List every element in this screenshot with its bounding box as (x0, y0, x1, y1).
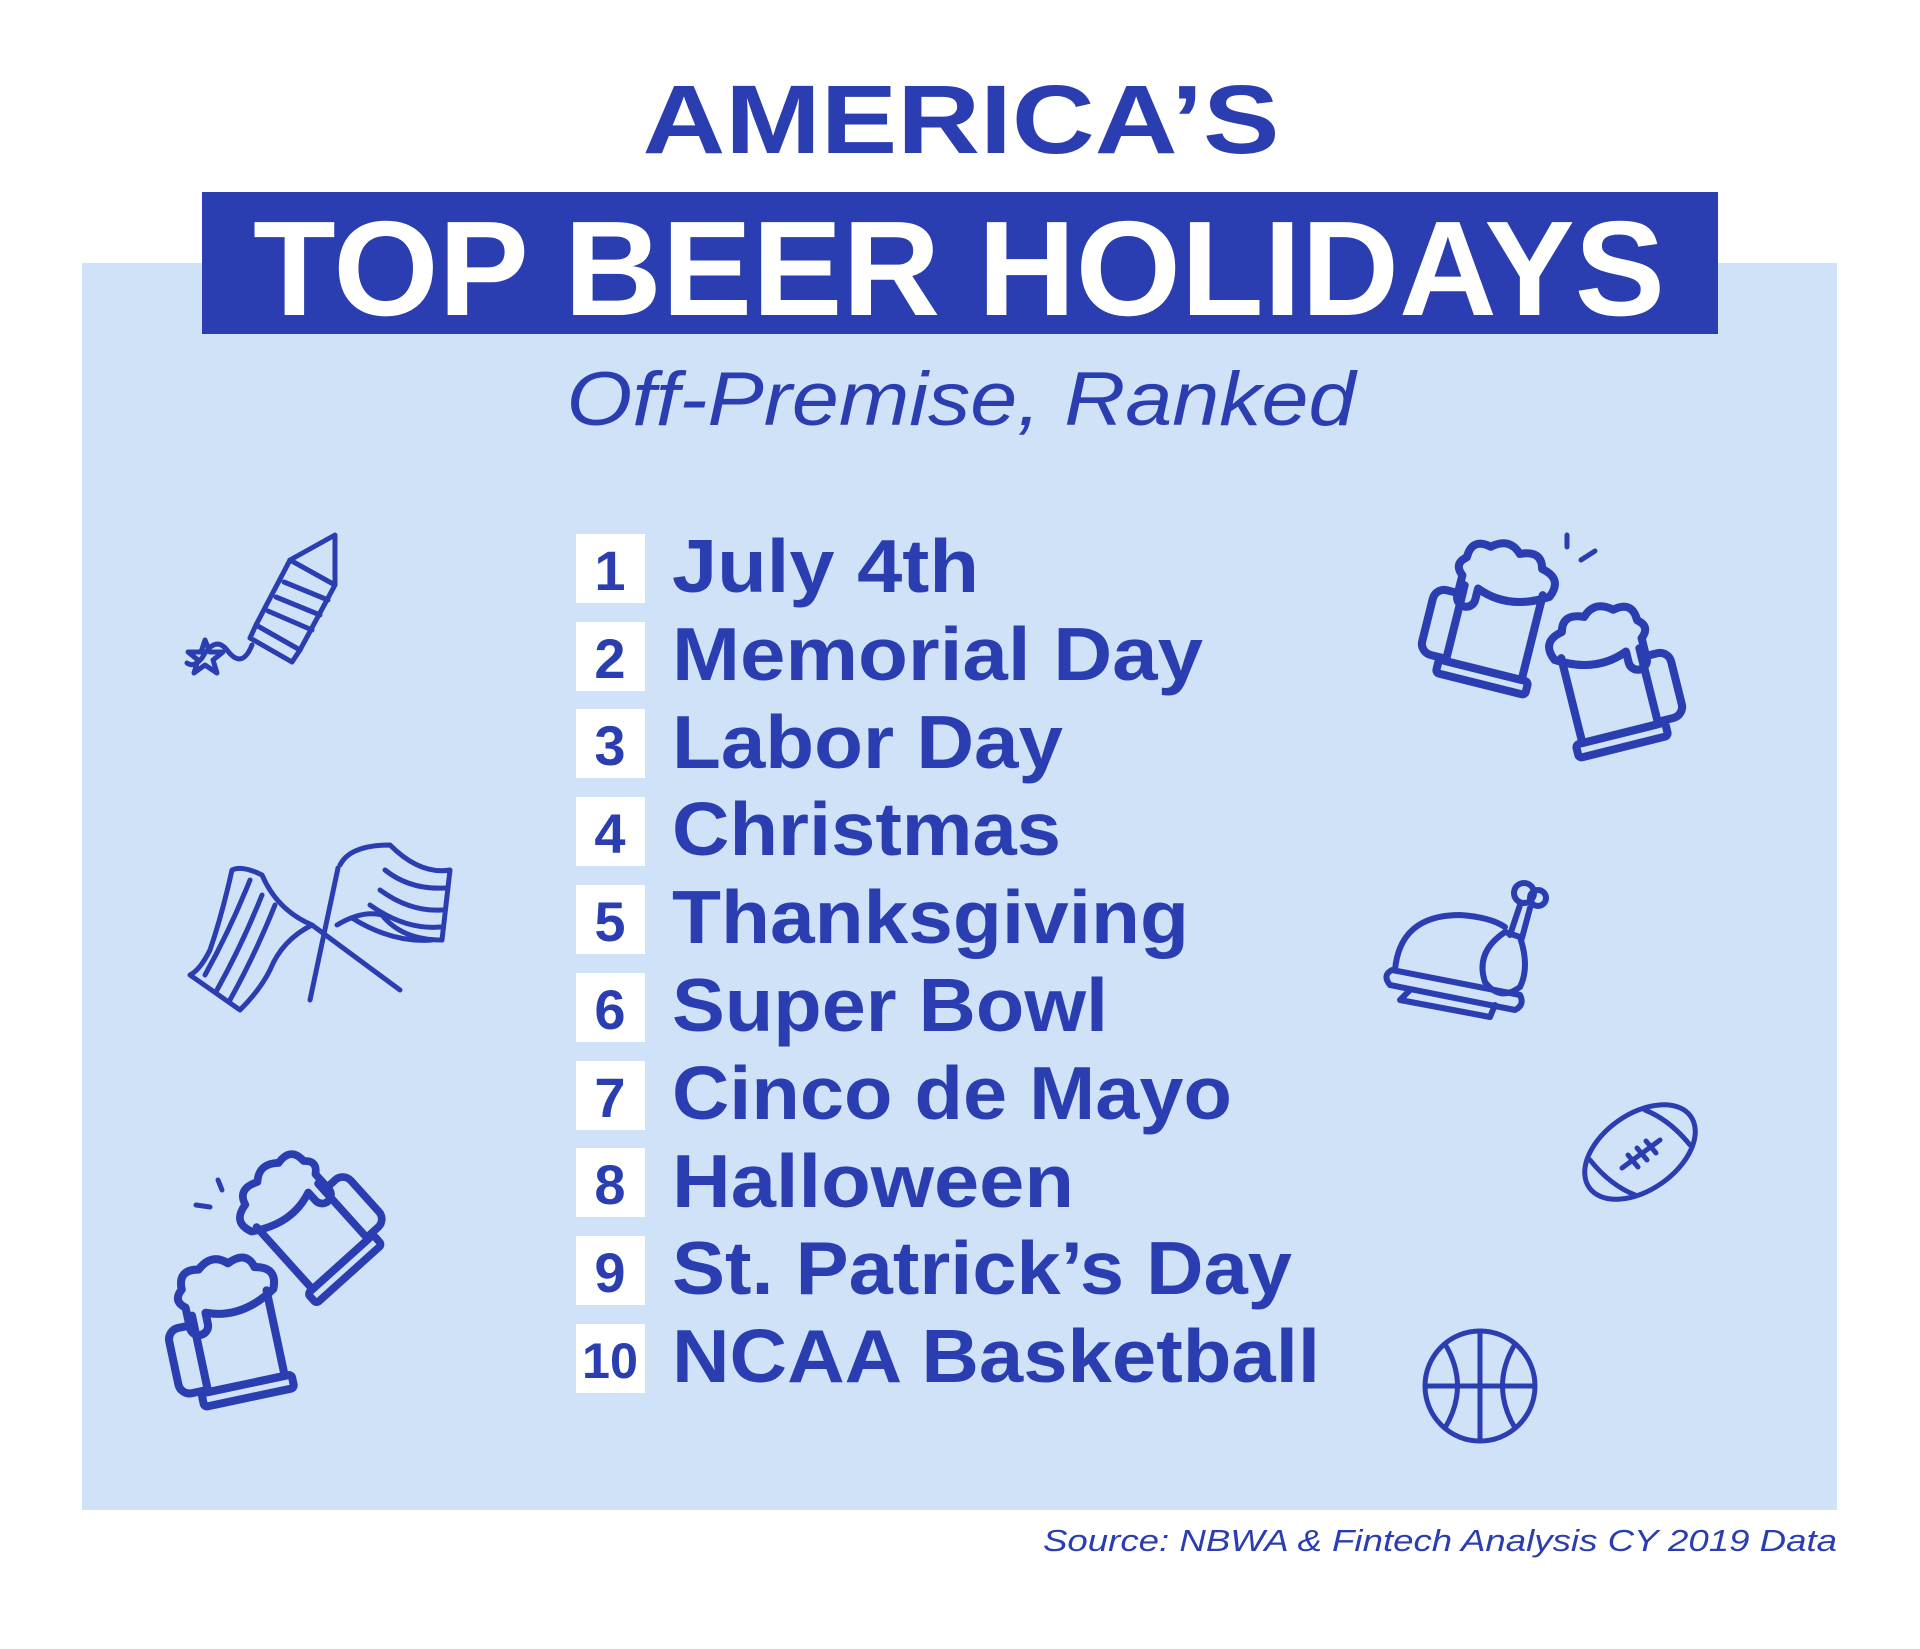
item 6: 6 (594, 978, 626, 1041)
item 3: 3 (594, 714, 626, 777)
item 1: 1 (594, 539, 626, 602)
item 6: Super Bowl (672, 963, 1108, 1047)
item 10: 10 (582, 1333, 638, 1389)
item 1: July 4th (672, 524, 979, 608)
title banner: TOP BEER HOLIDAYS (253, 193, 1665, 344)
item 4: 4 (594, 802, 626, 865)
icon: basketball (1425, 1331, 1535, 1441)
icon: football (1567, 1085, 1713, 1219)
icon: turkey (1386, 883, 1546, 1017)
item 10: NCAA Basketball (672, 1314, 1320, 1398)
title: AMERICA'S: AMERICA’S (642, 65, 1280, 174)
item 7: Cinco de Mayo (672, 1051, 1232, 1135)
ranked list (576, 524, 1320, 1398)
icon: firework rocket (187, 535, 335, 673)
item 2: Memorial Day (672, 612, 1203, 696)
icon: clinking beer mugs right (1416, 529, 1688, 759)
background panel (82, 263, 1837, 1510)
subtitle: Off-Premise, Ranked (566, 357, 1359, 442)
item 9: St. Patrick’s Day (672, 1226, 1292, 1310)
item 3: Labor Day (672, 700, 1063, 784)
source note: Source: NBWA & Fintech Analysis CY 2019 Data (1043, 1523, 1837, 1558)
item 8: 8 (594, 1153, 626, 1216)
item 5: Thanksgiving (672, 875, 1189, 959)
icon: crossed flags (190, 845, 450, 1010)
item 4: Christmas (672, 787, 1061, 871)
item 8: Halloween (672, 1139, 1074, 1223)
item 5: 5 (594, 890, 626, 953)
item 2: 2 (594, 627, 626, 690)
icon: clinking beer mugs left (154, 1130, 397, 1411)
item 7: 7 (594, 1066, 626, 1129)
item 9: 9 (594, 1241, 626, 1304)
